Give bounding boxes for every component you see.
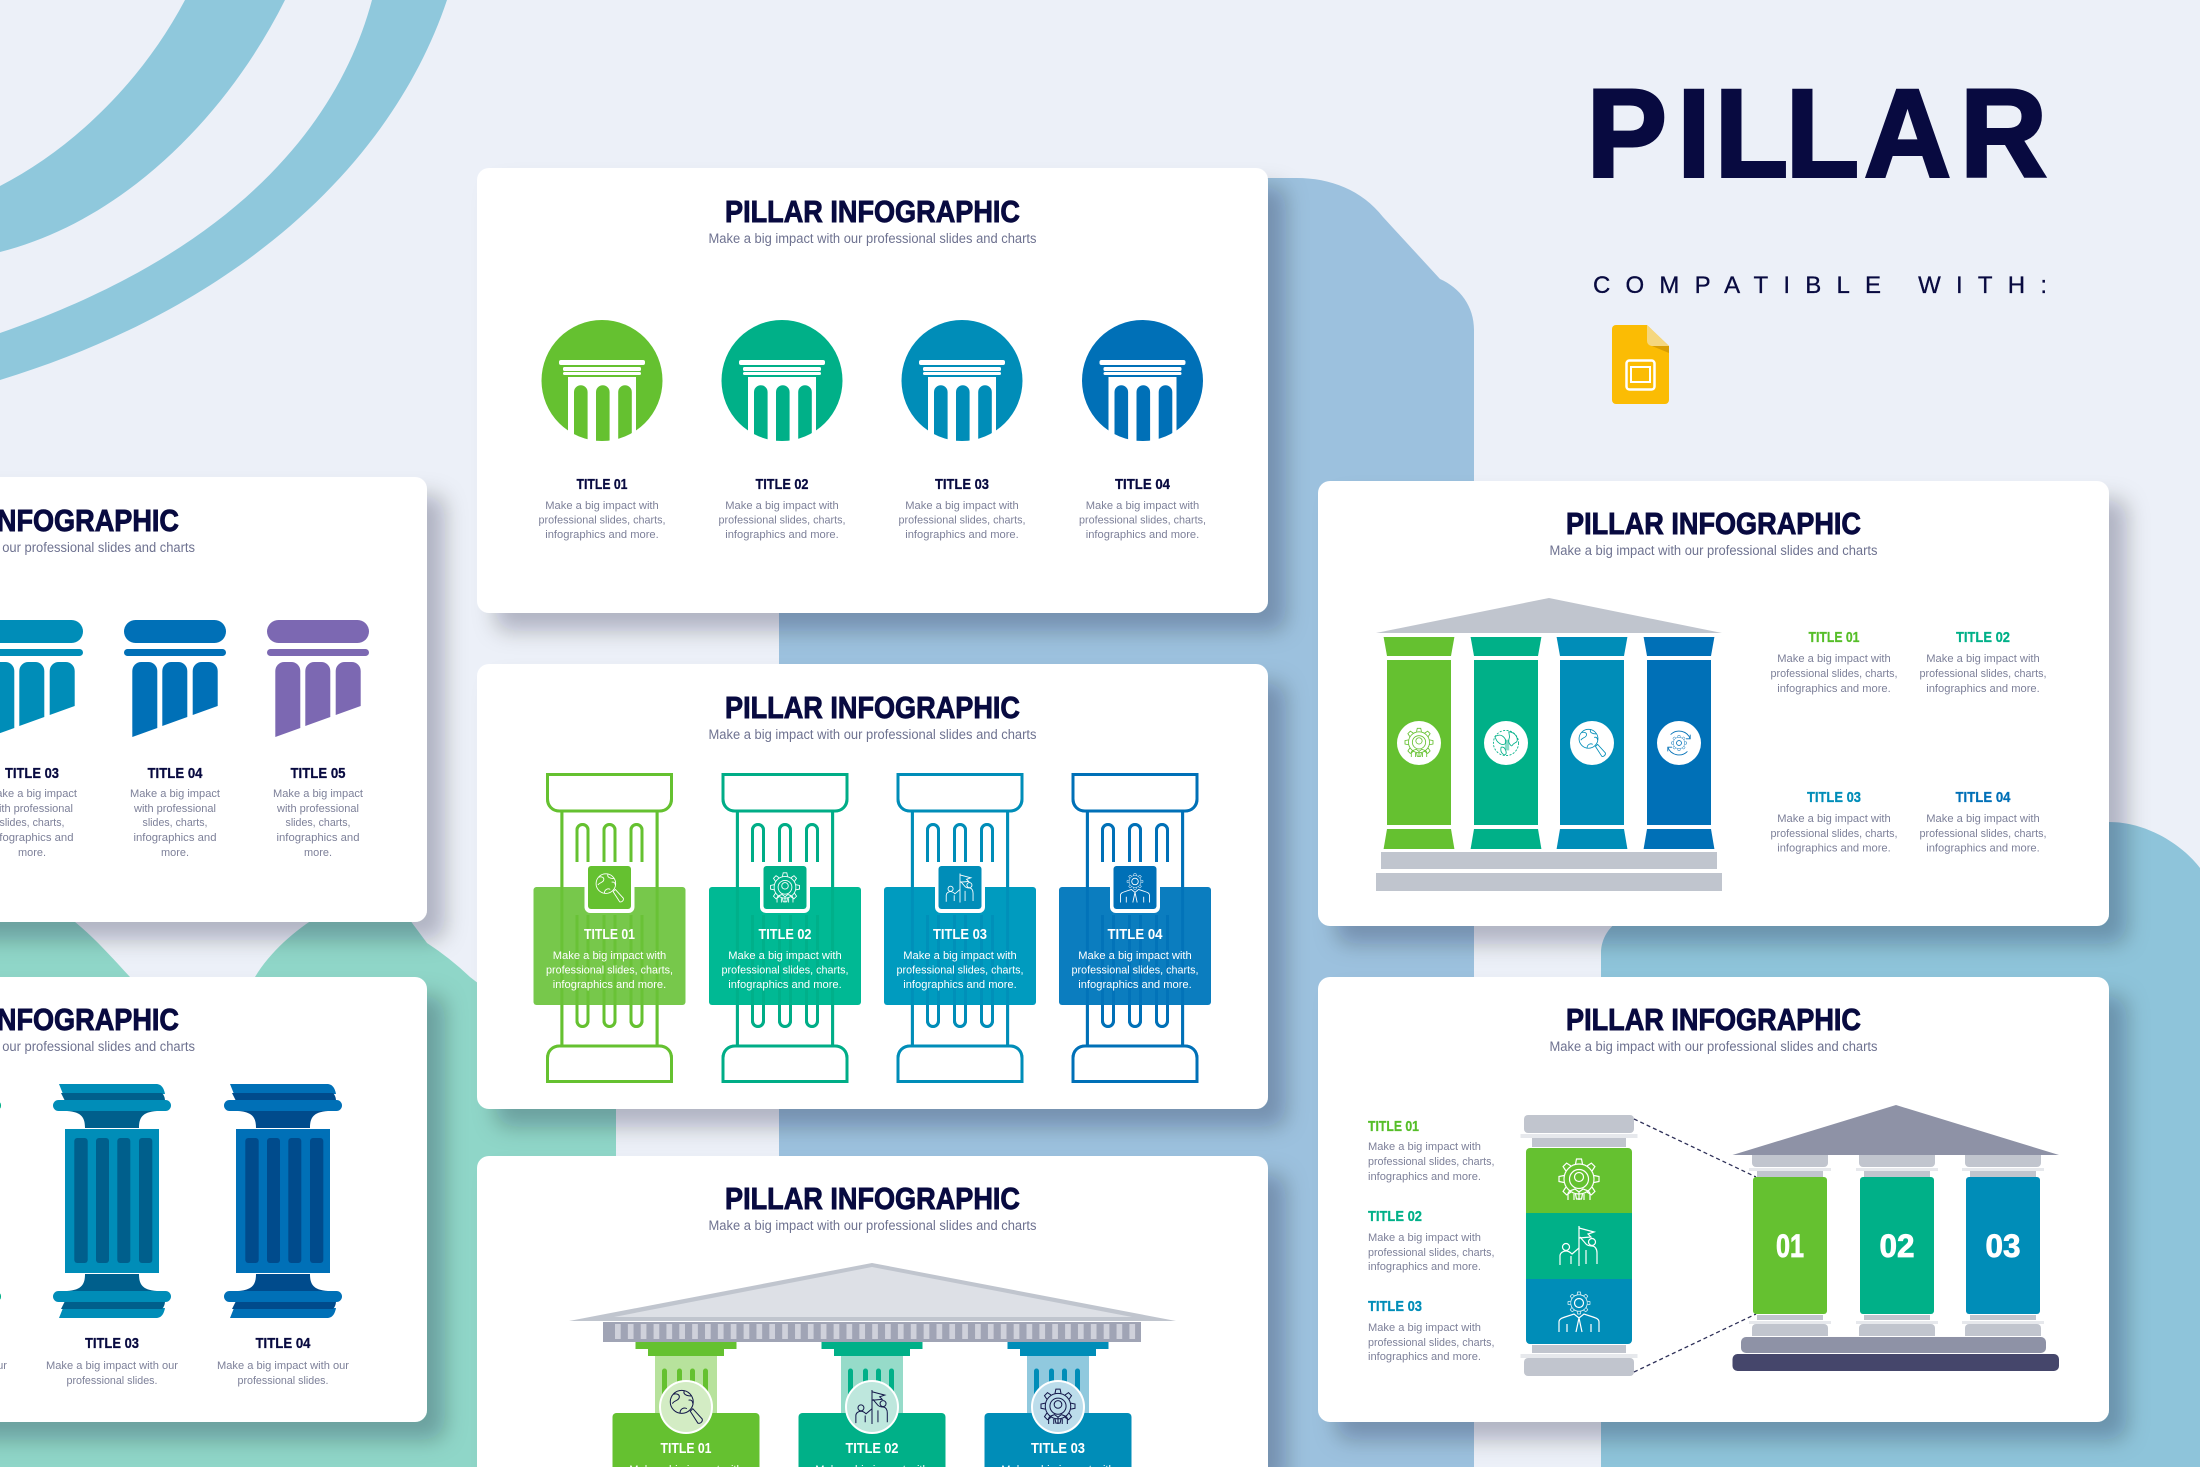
column 01 (612, 1342, 760, 1467)
column 03 (1557, 637, 1627, 849)
text block: title 02 (718, 477, 846, 541)
background blob: teal blue (1601, 822, 2200, 1467)
main title: PILLAR (1587, 64, 2047, 204)
text block: title 02: infographics and more. (725, 529, 839, 541)
outline pillar 02: TITLE 02 (758, 927, 812, 943)
text block: title 01: TITLE 01 (576, 477, 628, 493)
column 01: TITLE 01 (660, 1441, 712, 1457)
text block: title 04 (1079, 477, 1206, 541)
text block: title 02: TITLE 02 (1368, 1209, 1422, 1225)
column 03: 03 (1986, 1228, 2020, 1264)
text block: title 03 (46, 1336, 178, 1387)
text block: title 01: Make a big impact with (1368, 1141, 1481, 1153)
outline pillar 04: infographics and more. (1078, 979, 1192, 991)
icon: google slides (1612, 325, 1669, 404)
text block: title 02: Make a big impact with (725, 500, 839, 512)
panel: slide left top (five columns) (0, 477, 427, 922)
panel: slide centre middle (outline pillars) (477, 664, 1268, 1109)
card background (1318, 977, 2109, 1422)
text block: title 01: professional slides, charts, (538, 514, 666, 526)
dashed connector top (1634, 1119, 1756, 1177)
text block: title 03 (1368, 1299, 1494, 1363)
pillar circle 02 (722, 320, 842, 447)
temple roof (1376, 598, 1722, 633)
column 02 (1860, 1177, 1934, 1314)
text block: title 01: TITLE 01 (1808, 630, 1860, 646)
text block: title 01: professional slides, charts, (1368, 1156, 1494, 1168)
panel: slide centre top (circles) (477, 168, 1268, 613)
text block: title 03: infographics and more. (905, 529, 1019, 541)
text block: title 04: professional slides, charts, (1920, 828, 2046, 840)
text block: title 03: TITLE 03 (85, 1336, 139, 1352)
subheading: Make a big impact with our professional slides and charts (1550, 543, 1878, 558)
outline pillar 04: TITLE 04 (1108, 927, 1162, 943)
compatible with label: COMPATIBLE WITH: (1593, 272, 2047, 299)
card background (477, 1156, 1268, 1467)
text block: title 01: infographics and more. (1368, 1171, 1481, 1183)
panel: slide left bottom (columns) (0, 977, 427, 1422)
outline pillar 01: professional slides, charts, (546, 964, 673, 976)
outline pillar 03: infographics and more. (903, 979, 1017, 991)
column 01 (1384, 637, 1454, 849)
outline pillar 04: Make a big impact with (1078, 950, 1192, 962)
temple roof (569, 1263, 1176, 1321)
column 04 (1644, 637, 1714, 849)
outline pillar 02: infographics and more. (728, 979, 842, 991)
column 03 (984, 1342, 1132, 1467)
outline pillar 02: Make a big impact with (728, 950, 842, 962)
text block: title 03: Make a big impact with (1368, 1322, 1481, 1334)
outline pillar 04: professional slides, charts, (1072, 964, 1198, 976)
column 02 (798, 1342, 946, 1467)
outline pillar 04 (1059, 774, 1211, 1082)
panel: slide right top (four columns) (1318, 481, 2109, 926)
text block: title 04: infographics and more. (1926, 842, 2040, 854)
text block: title 02: Make a big impact with (1926, 653, 2040, 665)
text block: title 02 (1920, 630, 2046, 695)
text block: title 04: Make a big impact (130, 788, 220, 800)
text block: title 03: professional slides, charts, (898, 514, 1026, 526)
text block: title 03: TITLE 03 (1807, 790, 1861, 806)
text block: title 03: slides, charts, (0, 817, 64, 829)
temple base upper (1741, 1337, 2046, 1353)
text block: title 02: Make a big impact with (1368, 1232, 1481, 1244)
text block: title 01: TITLE 01 (1368, 1119, 1419, 1135)
text block: title 01: professional slides, charts, (1770, 668, 1898, 680)
column 02: TITLE 02 (846, 1441, 898, 1457)
text block: title 05: TITLE 05 (290, 766, 346, 782)
column 01: 01 (1776, 1228, 1804, 1264)
text block: title 04: professional slides. (238, 1375, 328, 1387)
text block: title 03: TITLE 03 (1368, 1299, 1422, 1315)
text block: title 02: professional slides, charts, (1920, 668, 2046, 680)
subheading: Make a big impact with our professional slides and charts (1550, 1039, 1878, 1054)
text block: title 04: Make a big impact with (1926, 813, 2040, 825)
text block: title 04: Make a big impact with our (217, 1360, 349, 1372)
outline pillar 01: TITLE 01 (584, 927, 635, 943)
text block: title 03: Make a big impact with (905, 500, 1019, 512)
dashed connector bottom (1634, 1314, 1756, 1372)
text block: title 03: professional slides. (66, 1375, 158, 1387)
text block: title 05: slides, charts, (286, 817, 350, 829)
column 02: 02 (1880, 1228, 1914, 1264)
column 03: TITLE 03 (1031, 1441, 1085, 1457)
text block: title 04 (217, 1336, 349, 1387)
outline pillar 03 (884, 774, 1036, 1082)
column 03 (1966, 1177, 2040, 1314)
text block: title 02: infographics and more. (1368, 1261, 1481, 1273)
text block: title 03: TITLE 03 (935, 477, 989, 493)
text block: title 05: infographics and (276, 832, 360, 844)
text block: title 04 (1920, 790, 2046, 854)
text block: title 04: infographics and more. (1086, 529, 1199, 541)
text block: title 01 (1770, 630, 1898, 695)
column 02 (1471, 637, 1541, 849)
card background (0, 977, 427, 1422)
text block: title 03: infographics and more. (1368, 1351, 1481, 1363)
text block: title 04: TITLE 04 (1956, 790, 2010, 806)
card background (0, 477, 427, 922)
subheading: Make a big impact with our professional slides and charts (708, 231, 1037, 246)
text block: title 03: more. (18, 847, 46, 859)
text block: title 02: professional slides, charts, (1368, 1247, 1494, 1259)
pillar circle 01 (542, 320, 662, 447)
text block: title 05: Make a big impact (273, 788, 363, 800)
outline pillar 01 (534, 774, 686, 1082)
text block: title 04: professional slides, charts, (1079, 514, 1206, 526)
text block: title 03 (1770, 790, 1898, 854)
outline pillar 02: professional slides, charts, (722, 964, 848, 976)
panel: slide right bottom (exploded pillar) (1318, 977, 2109, 1422)
text block: title 03: TITLE 03 (5, 766, 59, 782)
background blob: mint (0, 900, 616, 1467)
text block: title 01: infographics and more. (1777, 683, 1891, 695)
text block: title 05: more. (304, 847, 332, 859)
text block: title 04: with professional (133, 803, 216, 815)
temple frieze (603, 1322, 1141, 1342)
text block: title 05: with professional (276, 803, 359, 815)
text block: title 04: Make a big impact with (1086, 500, 1199, 512)
outline pillar 03: TITLE 03 (933, 927, 987, 943)
text block: title 04: more. (161, 847, 189, 859)
column 01 (1753, 1177, 1827, 1314)
text block: title 04: infographics and (134, 832, 216, 844)
text block: title 03: professional slides, charts, (1368, 1337, 1494, 1349)
card background (477, 168, 1268, 613)
text block: title 01: infographics and more. (545, 529, 659, 541)
text block: title 01 (1368, 1119, 1494, 1183)
heading: PILLAR INFOGRAPHIC (1566, 1002, 1861, 1037)
pillar circle 04 (1082, 320, 1203, 447)
column 04 (224, 1084, 342, 1318)
text block: title 02: infographics and more. (1926, 683, 2040, 695)
temple column caps (1749, 1155, 2044, 1336)
text block: title 03: Make a big impact with our (46, 1360, 178, 1372)
text block: title 01 (538, 477, 666, 541)
text block: title 04: TITLE 04 (256, 1336, 310, 1352)
heading: PILLAR INFOGRAPHIC (725, 194, 1020, 229)
outline pillar 03: professional slides, charts, (896, 964, 1024, 976)
text block: title 03: professional slides, charts, (1770, 828, 1898, 840)
text block: title 03 (0, 766, 77, 859)
text block: title 04: TITLE 04 (1115, 477, 1170, 493)
previous column edge (0, 1101, 1, 1301)
heading: PILLAR INFOGRAPHIC (725, 1181, 1020, 1216)
card background (1318, 481, 2109, 926)
text block: title 01: Make a big impact with (545, 500, 659, 512)
card background (477, 664, 1268, 1109)
text block: title 03 (898, 477, 1026, 541)
decorative arc bands (0, 0, 447, 380)
pillar icon 05 (267, 620, 369, 737)
temple base lower (1732, 1354, 2059, 1371)
text block: title 03: Make a big impact with (1777, 813, 1891, 825)
pillar icon 03 (0, 620, 83, 737)
panel: slide centre bottom (temple) (477, 1156, 1268, 1467)
text block: title 04: slides, charts, (142, 817, 208, 829)
outline pillar 03: Make a big impact with (903, 950, 1017, 962)
heading: PILLAR INFOGRAPHIC (725, 690, 1020, 725)
outline pillar 01: infographics and more. (553, 979, 666, 991)
text block: title 05 (273, 766, 363, 859)
background blob: blue (779, 178, 1474, 1467)
text block: title 02 (1368, 1209, 1494, 1273)
text block: title 02: TITLE 02 (1956, 630, 2010, 646)
exploded pillar (1520, 1115, 1638, 1376)
heading: PILLAR INFOGRAPHIC (1566, 506, 1861, 541)
subheading: Make a big impact with our professional slides and charts (708, 727, 1037, 742)
temple roof (1732, 1105, 2059, 1155)
pillar icon 04 (124, 620, 226, 737)
text block: title 02: professional slides, charts, (718, 514, 846, 526)
pillar circle 03 (902, 320, 1022, 447)
outline pillar 02 (709, 774, 861, 1082)
text block: title 03: infographics and more. (1777, 842, 1891, 854)
temple base (1376, 852, 1722, 891)
outline pillar 01: Make a big impact with (553, 950, 666, 962)
text block: title 04 (130, 766, 220, 859)
column 03 (53, 1084, 171, 1318)
text block: title 04: TITLE 04 (148, 766, 202, 782)
subheading: Make a big impact with our professional slides and charts (708, 1218, 1037, 1233)
text block: title 02: TITLE 02 (756, 477, 808, 493)
text block: title 01: Make a big impact with (1777, 653, 1891, 665)
